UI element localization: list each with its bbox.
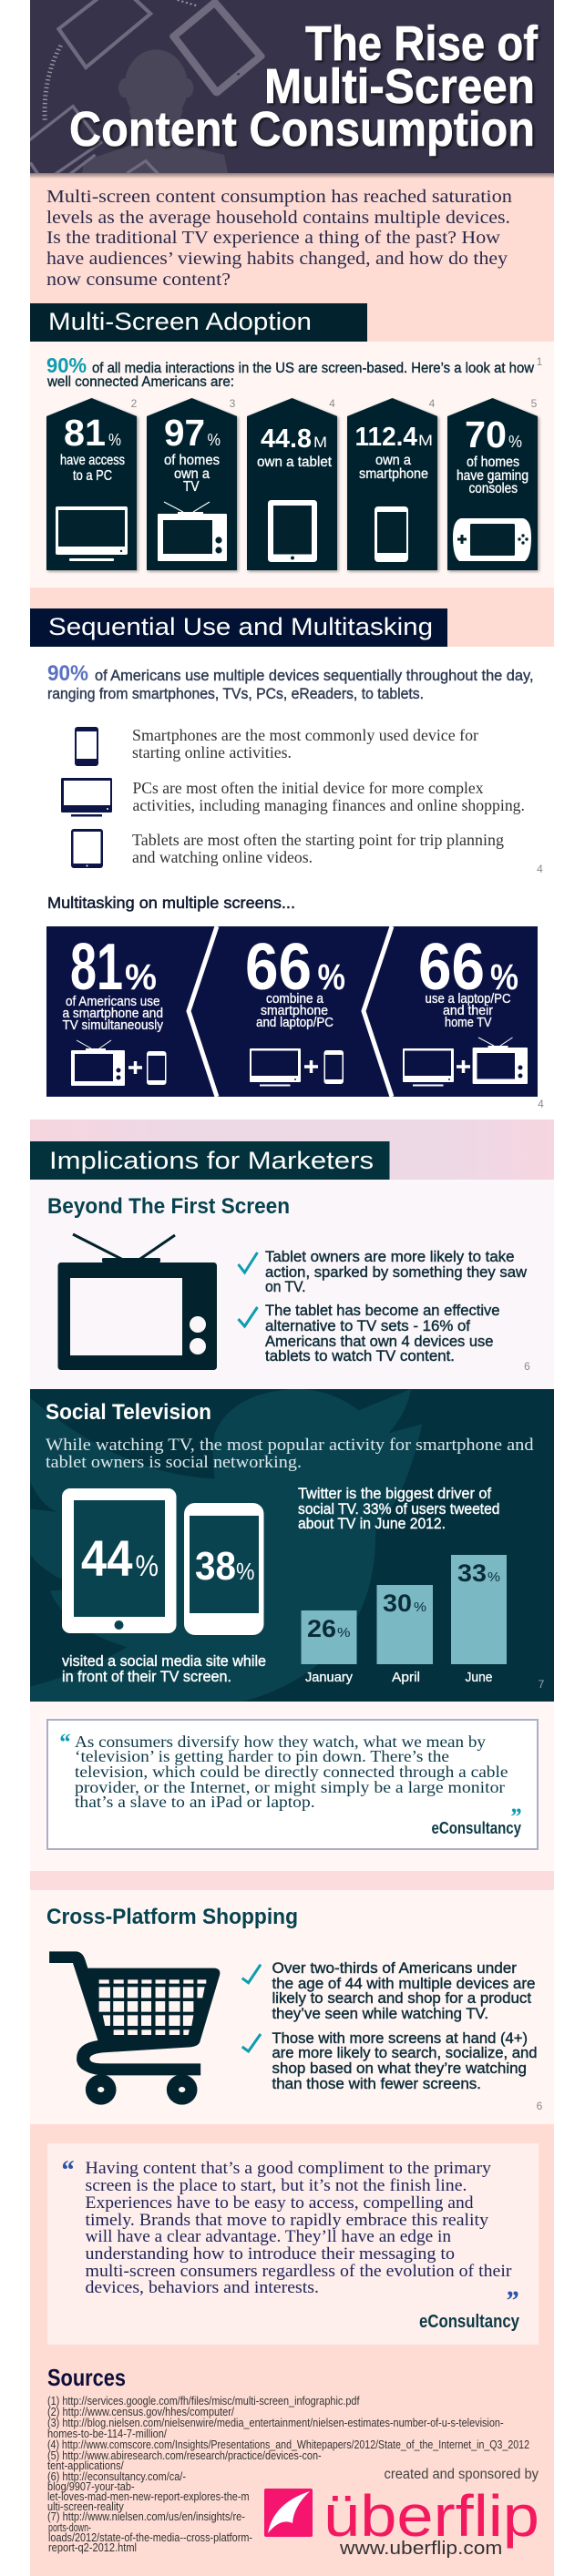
sources list: loads/2012/state-of-the-media--cross-platform- (48, 2531, 252, 2544)
icon: smartphone (75, 727, 98, 766)
bullet 2 text: are more likely to search, socialize, and (272, 2045, 538, 2061)
sources list: ports-down- (48, 2521, 91, 2534)
attribution: eConsultancy (432, 1819, 521, 1837)
card: 97% homes own a TV: 3 (230, 397, 236, 410)
quote text: provider, or the Internet, or might simply be a large monitor (75, 1778, 505, 1796)
icon: tv plus phone (71, 1040, 166, 1086)
intro text: levels as the average household contains multiple devices. (46, 208, 510, 228)
checkmark 2 (242, 2034, 261, 2051)
card: 81% access to a PC (46, 397, 138, 570)
card: 97% homes own a TV: own a (174, 466, 210, 482)
icon: monitor (56, 506, 128, 561)
icon: tablet 44% (62, 1488, 177, 1633)
sources list: tent-applications/ (47, 2459, 124, 2472)
panel: sequential use (47, 661, 543, 912)
twitter text: social TV. 33% of users tweeted (298, 1501, 499, 1518)
bullet 2 text (272, 2030, 538, 2092)
card: 70% gaming consoles: % (508, 433, 522, 451)
bullet 2 text: Americans that own 4 devices use (265, 1334, 494, 1350)
sources list: (3) http://blog.nielsen.com/nielsenwire/media_entertainment/nielsen-estimates-number-of-u-s-television- (47, 2417, 504, 2429)
card: 81% access to a PC: have access (60, 453, 125, 468)
open quote mark: “ (58, 1729, 70, 1755)
icon: tablet (71, 829, 103, 868)
pink divider (30, 1871, 554, 1890)
card: 112.4M own a smartphone: smartphone (359, 466, 428, 482)
heading: Multi-Screen Adoption (30, 303, 367, 342)
panel: beyond the first screen: 6 (524, 1360, 530, 1373)
checkmark 1 (242, 1965, 261, 1983)
quote box 2 (47, 2143, 539, 2345)
bullet 1 text: they’ve seen while watching TV. (272, 2006, 488, 2022)
sources list: (6) http://econsultancy.com/ca/- (47, 2470, 186, 2483)
icon: tablet (268, 500, 317, 562)
card: 81% access to a PC: 2 (131, 397, 138, 410)
stat: 66% smartphone and laptop: 66 (245, 931, 312, 1004)
quote text: understanding how to introduce their messaging to (86, 2245, 455, 2264)
adoption intro text: 1 (537, 355, 543, 368)
panel: beyond the first screen (30, 1180, 554, 1389)
stat: 66% laptop and TV: 66 (418, 931, 485, 1004)
text: smartphones: Smartphones are the most commonly used device for (132, 726, 478, 744)
bar: April (377, 1585, 433, 1685)
heading: Implications for Marketers (30, 1119, 554, 1180)
card: 97% homes own a TV: TV (183, 479, 200, 495)
social intro text: While watching TV, the most popular activity for smartphone and (46, 1436, 534, 1455)
twitter bird silhouette (30, 1389, 422, 1702)
card: 97% homes own a TV (147, 397, 237, 570)
adoption intro text: 90% (46, 353, 87, 377)
heading: Sequential Use and Multitasking: Sequential Use and Multitasking (48, 613, 433, 640)
sources list: let-loves-mad-men-new-report-explores-the-m (47, 2490, 250, 2503)
bar: April: April (392, 1670, 420, 1685)
sources list: report-q2-2012.html (48, 2541, 137, 2554)
bullet 1 text (265, 1249, 527, 1295)
icon: phone 38%: % (236, 1558, 255, 1585)
icon: shopping cart (49, 1951, 220, 2105)
bullet 2 text: than those with fewer screens. (272, 2076, 481, 2092)
sponsor block (264, 2467, 539, 2559)
bullet 1 text (272, 1960, 536, 2022)
sources list: (7) http://www.nielsen.com/us/en/insights/re- (47, 2510, 245, 2523)
stat: 66% laptop and TV (418, 931, 518, 1030)
sources list: (1) http://services.google.com/fh/files/misc/multi-screen_infographic.pdf (47, 2395, 360, 2407)
pink divider (30, 588, 554, 608)
panel: sequential use: 4 (537, 863, 543, 875)
text: PCs (133, 779, 525, 814)
heading: Implications for Marketers: Implications for Marketers (49, 1147, 374, 1174)
text: PCs: PCs are most often the initial device for more complex (133, 779, 484, 797)
card: 97% homes own a TV: 97 (164, 412, 205, 454)
bar: June: 33 (457, 1559, 487, 1587)
icon: big tv (58, 1234, 217, 1370)
bar: June (451, 1555, 507, 1685)
stat: 66% laptop and TV: home TV (445, 1016, 492, 1030)
panel: intro (30, 173, 554, 342)
sources heading: Sources (47, 2364, 126, 2391)
panel: social television (30, 1389, 554, 1702)
card: 44.8M own a tablet: 4 (329, 397, 335, 410)
icon: smartphone (375, 506, 408, 562)
adoption intro text: well connected Americans are: (46, 374, 234, 390)
twitter text: about TV in June 2012. (298, 1516, 446, 1532)
sources list: ulti-screen-reality (47, 2500, 124, 2513)
card: 44.8M own a tablet: own a tablet (257, 455, 333, 470)
quote text (86, 2160, 512, 2297)
card: 81% access to a PC: to a PC (73, 468, 112, 484)
text: smartphones: starting online activities. (132, 743, 292, 762)
card: 70% gaming consoles: 5 (531, 397, 538, 410)
bar: January: % (337, 1625, 350, 1641)
stat: 81% (62, 931, 164, 1033)
sources list (47, 2395, 529, 2554)
bullet 2 text: The tablet has become an effective (265, 1303, 499, 1319)
panel: eConsultancy quote 1 (30, 1702, 554, 1871)
intro text: Multi-screen content consumption has reached saturation (46, 187, 512, 207)
card: 70% gaming consoles: have gaming (457, 468, 529, 484)
card: 44.8M own a tablet (247, 397, 337, 570)
checkmark 2 (239, 1307, 257, 1326)
bullet 1 text: likely to search and shop for a product (272, 1990, 531, 2007)
wordmark: überflip (323, 2483, 539, 2549)
stat: 66% smartphone and laptop: % (317, 957, 345, 997)
intro text: Is the traditional TV experience a thing of the past? How (46, 228, 500, 248)
caption: social media visits: in front of their TV screen. (62, 1669, 231, 1685)
card: 70% gaming consoles: of homes (467, 455, 519, 470)
icon: tablet 44%: 44 (81, 1529, 133, 1587)
text: tablets (132, 831, 504, 866)
stat: 81%: TV simultaneously (62, 1018, 164, 1033)
card: 112.4M own a smartphone: 112.4 (355, 423, 417, 452)
stat: 66% smartphone and laptop: combine a (266, 992, 324, 1007)
card: 70% gaming consoles (447, 397, 538, 570)
title: Multi-Screen (264, 59, 535, 114)
bar chart: tweets about TV (301, 1555, 507, 1685)
adoption intro text (46, 353, 543, 390)
icon: phone 38%: 38 (195, 1544, 236, 1589)
quote text: timely. Brands that move to rapidly embrace this reality (86, 2212, 489, 2230)
twitter text: Twitter is the biggest driver of (298, 1486, 491, 1502)
caption: social media visits: visited a social media site while (62, 1653, 266, 1670)
icon: tv (158, 502, 227, 561)
heading: Sequential Use and Multitasking (30, 608, 554, 647)
quote text: television, which could be directly connected through a cable (75, 1763, 508, 1781)
panel: social television: 7 (539, 1678, 545, 1691)
bar: January: 26 (307, 1615, 336, 1642)
text: tablets: Tablets are most often the starting point for trip planning (132, 831, 504, 849)
heading: Multi-Screen Adoption: Multi-Screen Adoption (48, 308, 312, 335)
sources list: homes-to-be-114-7-million/ (47, 2428, 167, 2440)
card: 112.4M own a smartphone: 4 (429, 397, 436, 410)
text: tablets: and watching online videos. (132, 848, 313, 866)
stat: 66% laptop and TV: use a laptop/PC (425, 992, 510, 1007)
sequential intro text: 90% (47, 661, 88, 686)
icon: tablet 44%: % (135, 1549, 159, 1582)
bullet 2 text: tablets to watch TV content. (265, 1348, 455, 1365)
quote text: ‘television’ is getting harder to pin down. There’s the (75, 1747, 449, 1765)
quote text (75, 1733, 508, 1811)
icon: phone 38% (184, 1503, 264, 1635)
text: PCs: activities, including managing finances and online shopping. (133, 796, 525, 814)
bar: April: % (414, 1600, 426, 1615)
quote text: Experiences have to be easy to access, compelling and (86, 2194, 474, 2213)
quote text: As consumers diversify how they watch, what we mean by (75, 1733, 486, 1751)
panel: multi-screen adoption (30, 342, 554, 588)
sources list: (2) http://www.census.gov/hhes/computer/ (47, 2406, 234, 2418)
stat: 81%: 81 (70, 931, 123, 1004)
sponsor block: created and sponsored by (385, 2467, 539, 2482)
stat: 81%: % (125, 957, 157, 997)
quote text: devices, behaviors and interests. (86, 2279, 319, 2297)
card: 97% homes own a TV: of homes (164, 453, 220, 468)
bar: April: 30 (383, 1590, 412, 1617)
subheading: Social Television (46, 1400, 211, 1425)
card: 112.4M own a smartphone: M (418, 432, 433, 449)
caption: social media visits (62, 1653, 266, 1685)
bar: June: % (488, 1569, 500, 1585)
bar: January (301, 1610, 357, 1685)
sequential intro text: of Americans use multiple devices sequentially throughout the day, (95, 668, 534, 684)
stat: 66% smartphone and laptop (245, 931, 345, 1030)
sources list: (5) http://www.abiresearch.com/research/practice/devices-con- (47, 2449, 322, 2462)
stat: 66% smartphone and laptop: and laptop/PC (256, 1016, 334, 1030)
quote text: multi-screen consumers regardless of the evolution of their (86, 2263, 512, 2281)
card: 81% access to a PC: 81 (64, 412, 106, 454)
sequential intro text: ranging from smartphones, TVs, PCs, eReaders, to tablets. (47, 686, 424, 702)
panel: header (28, 0, 554, 176)
panel: multitasking stats (46, 926, 538, 1097)
close quote mark: ” (509, 1804, 521, 1830)
title: The Rise of (305, 16, 539, 71)
text: 4 (538, 1098, 544, 1110)
icon: monitor plus tv (403, 1038, 528, 1086)
website: www.uberflip.com (339, 2539, 502, 2559)
card: 112.4M own a smartphone: own a (375, 453, 411, 468)
stat: 66% laptop and TV: % (490, 957, 518, 997)
social intro text (46, 1436, 534, 1472)
title (69, 16, 539, 157)
stat: 66% smartphone and laptop: smartphone (261, 1004, 328, 1018)
bullet 2 text: Those with more screens at hand (4+) (272, 2030, 528, 2047)
bullet 1 text: Tablet owners are more likely to take (265, 1249, 514, 1265)
quote text: that’s a slave to an iPad or laptop. (75, 1793, 315, 1811)
checkmark 1 (239, 1252, 257, 1273)
card: 70% gaming consoles: 70 (465, 414, 507, 455)
bullet 1 text: on TV. (265, 1279, 306, 1295)
card: 44.8M own a tablet: M (313, 434, 327, 451)
card: 97% homes own a TV: % (208, 431, 221, 449)
bullet 2 text (265, 1303, 499, 1365)
sequential intro text (47, 661, 534, 702)
bullet 1 text: the age of 44 with multiple devices are (272, 1976, 536, 1992)
header illustration: person with devices (28, 0, 261, 176)
bar: January: January (305, 1670, 353, 1685)
bullet 1 text: Over two-thirds of Americans under (272, 1960, 518, 1977)
open quote mark: “ (60, 2155, 74, 2185)
bar: June: June (465, 1670, 492, 1685)
subheading: multitasking: Multitasking on multiple screens... (47, 894, 295, 912)
quote text: screen is the place to start, but it’s not the finish line. (86, 2177, 467, 2195)
quote text: will have a clear advantage. They’ll have an edge in (86, 2228, 451, 2246)
quote text: Having content that’s a good compliment to the primary (86, 2160, 492, 2178)
bullet 2 text: alternative to TV sets - 16% of (265, 1318, 470, 1334)
text: smartphones (132, 726, 478, 762)
icon: game console (453, 518, 531, 561)
title: Content Consumption (69, 102, 535, 157)
intro text: now consume content? (46, 270, 231, 290)
stat: 81%: of Americans use (66, 995, 160, 1009)
icon: monitor plus phone (250, 1048, 344, 1086)
subheading: Cross-Platform Shopping (46, 1905, 298, 1929)
subheading: Beyond The First Screen (47, 1194, 290, 1219)
sources list: blog/9907-your-tab- (47, 2480, 135, 2493)
adoption intro text: of all media interactions in the US are screen-based. Here’s a look at how (92, 361, 535, 376)
attribution: eConsultancy (419, 2312, 520, 2332)
card: 44.8M own a tablet: 44.8 (261, 424, 312, 454)
panel: cross-platform shopping: 6 (537, 2100, 543, 2112)
bullet 2 text: shop based on what they’re watching (272, 2060, 527, 2077)
panel: cross-platform shopping (30, 1890, 554, 2124)
social intro text: tablet owners is social networking. (46, 1454, 302, 1472)
twitter text (298, 1486, 499, 1532)
stat: 81%: a smartphone and (62, 1007, 163, 1021)
intro text: have audiences’ viewing habits changed, and how do they (46, 249, 508, 269)
close quote mark: ” (505, 2285, 518, 2315)
icon: monitor (61, 778, 112, 816)
card: 70% gaming consoles: consoles (468, 481, 518, 496)
card: 81% access to a PC: % (108, 431, 121, 449)
icon: uberflip logo (264, 2489, 313, 2537)
intro text (46, 187, 512, 290)
card: 112.4M own a smartphone (347, 397, 437, 570)
panel: closing section (30, 2124, 554, 2576)
bullet 1 text: action, sparked by something they saw (265, 1264, 527, 1281)
stat: 66% laptop and TV: and their (443, 1004, 493, 1018)
